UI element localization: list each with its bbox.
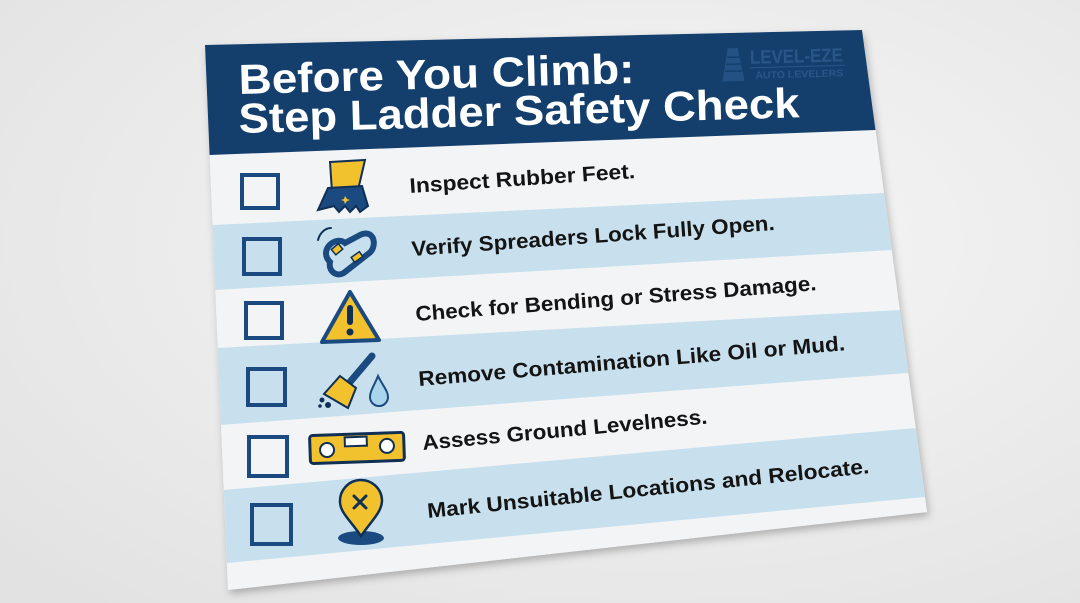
- icon: broom and drop: [318, 356, 388, 408]
- checklist text: Remove Contamination Like Oil or Mud.: [417, 332, 846, 391]
- icon: spirit level: [310, 432, 404, 464]
- checklist text: Inspect Rubber Feet.: [409, 160, 636, 198]
- icon: rubber foot: [318, 160, 368, 212]
- logo: LEVEL-EZE: [750, 45, 843, 69]
- header band: [205, 30, 876, 155]
- checklist text: [409, 160, 870, 523]
- title: Step Ladder Safety Check: [238, 79, 801, 142]
- icon: warning triangle: [322, 292, 379, 342]
- checklist text: Mark Unsuitable Locations and Relocate.: [426, 455, 870, 523]
- icon: carabiner: [318, 228, 374, 274]
- logo: AUTO LEVELERS: [755, 68, 844, 82]
- row band 4: [218, 310, 908, 425]
- icon: location pin with x: [338, 480, 384, 545]
- checklist text: Check for Bending or Stress Damage.: [415, 272, 817, 326]
- row band 2: [213, 193, 892, 290]
- logo: [722, 45, 845, 83]
- title: [238, 45, 801, 142]
- checklist text: Verify Spreaders Lock Fully Open.: [411, 212, 775, 261]
- row band 6: [224, 428, 925, 563]
- title: Before You Climb:: [238, 45, 635, 103]
- checkboxes: [242, 175, 291, 544]
- card: [205, 30, 927, 590]
- checklist text: Assess Ground Levelness.: [421, 406, 708, 455]
